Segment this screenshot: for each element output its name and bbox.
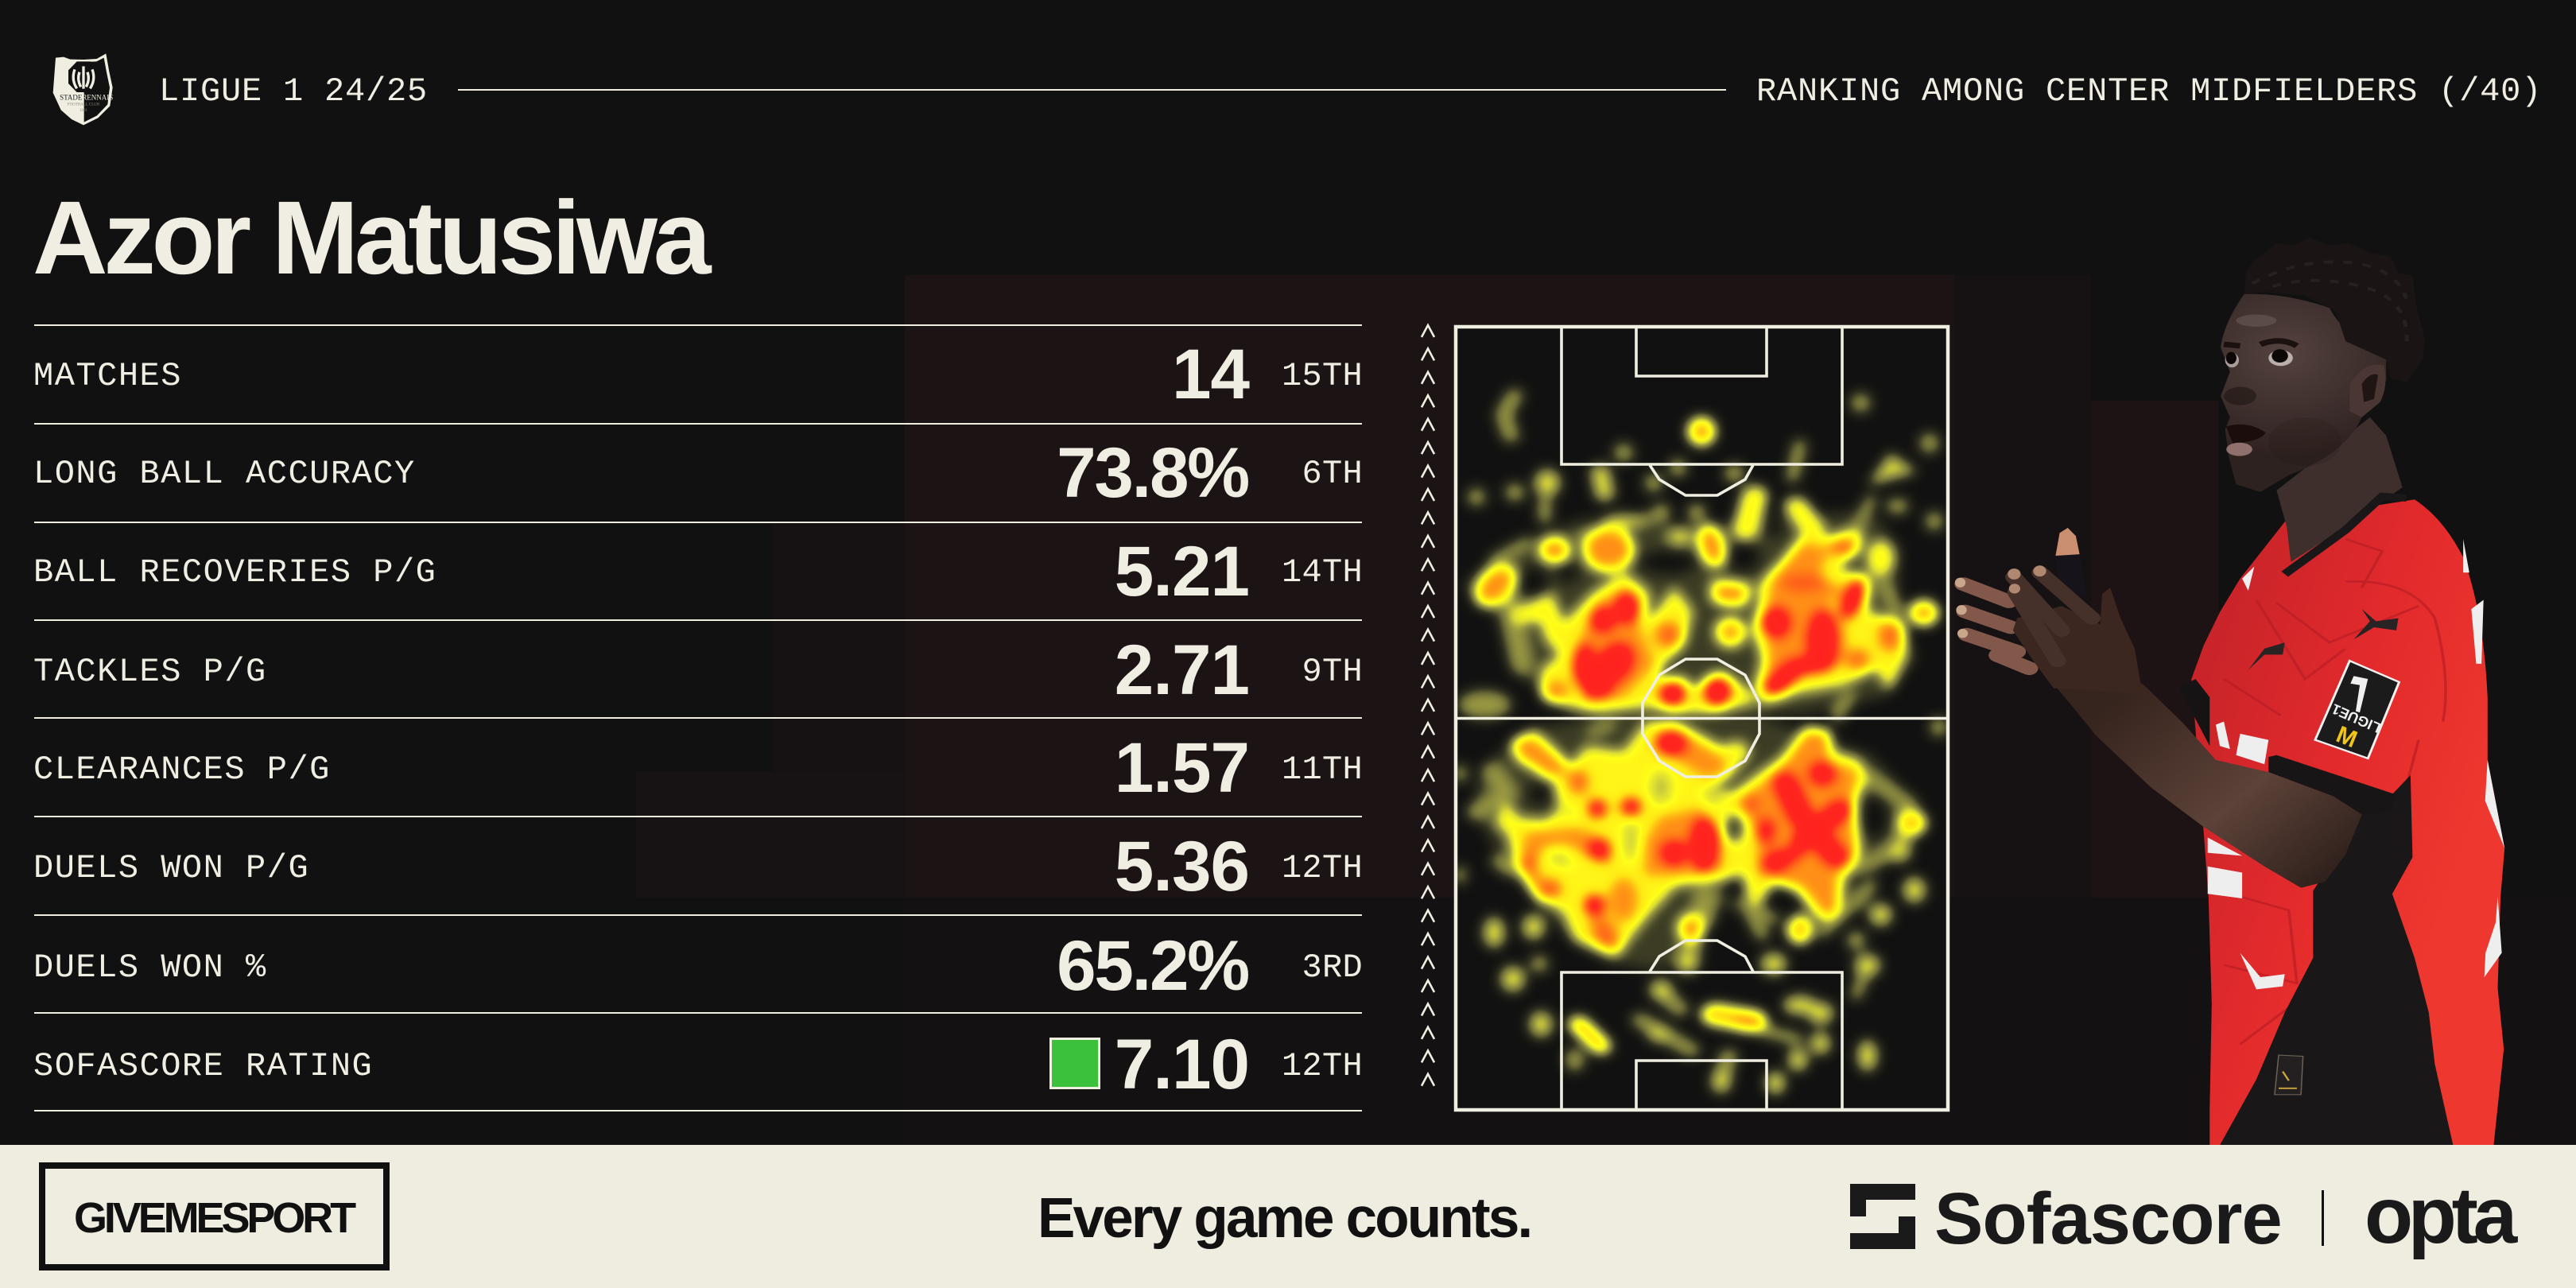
mouth xyxy=(2226,425,2266,443)
right hand xyxy=(2013,588,2151,694)
row: matches: 15TH xyxy=(1282,357,1363,395)
row: ball recoveries xyxy=(33,531,1363,611)
row: duels won percent xyxy=(33,925,1363,1005)
row: tackles: 2.71 xyxy=(1115,630,1249,709)
row: ball recoveries: 5.21 xyxy=(1115,531,1249,611)
row: clearances xyxy=(33,727,1363,807)
tagline: Every game counts. xyxy=(1038,1187,1530,1250)
hair xyxy=(2244,238,2425,382)
row: long ball accuracy xyxy=(33,433,1363,512)
football pitch lines xyxy=(1456,327,1948,1110)
row: clearances: CLEARANCES P/G xyxy=(33,751,331,789)
raised finger with tape xyxy=(2055,528,2080,556)
jersey xyxy=(2191,499,2504,1145)
givemesport logo xyxy=(42,1166,386,1267)
dark sleeve behind arm xyxy=(2179,679,2209,746)
row: ball recoveries: BALL RECOVERIES P/G xyxy=(33,553,436,592)
crest lettering: RENNAIS xyxy=(82,93,113,101)
footer band xyxy=(0,1145,2576,1288)
heatmap xyxy=(1447,318,1956,1121)
row: sofascore rating: 7.10 xyxy=(1115,1024,1249,1104)
black side panel xyxy=(2220,775,2453,1145)
head xyxy=(2221,294,2386,492)
collar xyxy=(2285,496,2407,574)
row: long ball accuracy: 6TH xyxy=(1302,455,1363,493)
row: duels won percent: 3RD xyxy=(1302,949,1363,987)
row: long ball accuracy: LONG BALL ACCURACY xyxy=(33,455,416,493)
row: duels won per game: 5.36 xyxy=(1115,826,1249,906)
pitch background xyxy=(1454,325,1949,1111)
left hand fingers xyxy=(1964,584,2029,669)
right arm xyxy=(2054,684,2362,888)
sofascore logo: Sofascore xyxy=(1934,1178,2282,1259)
crest lettering xyxy=(60,93,113,113)
row: ball recoveries: 14TH xyxy=(1282,553,1363,592)
sleeve patch xyxy=(2315,661,2399,758)
neck xyxy=(2276,417,2403,562)
row: matches xyxy=(33,334,1363,413)
pin badge xyxy=(2275,1055,2303,1095)
row: sofascore rating: 12TH xyxy=(1282,1047,1363,1085)
row: matches: 14 xyxy=(1172,334,1250,413)
row: sofascore rating: SOFASCORE RATING xyxy=(33,1047,373,1085)
row: clearances: 11TH xyxy=(1282,751,1363,789)
eyes xyxy=(2268,350,2293,366)
row: tackles: TACKLES P/G xyxy=(33,653,267,691)
ear xyxy=(2349,364,2385,417)
header: league label: LIGUE 1 24/25 xyxy=(159,72,428,111)
row: duels won percent: DUELS WON % xyxy=(33,949,267,987)
title: player name: Azor Matusiwa xyxy=(33,179,712,296)
player photo illustration xyxy=(1955,238,2504,1145)
crest lettering: 1901 xyxy=(80,109,87,113)
row: matches: MATCHES xyxy=(33,357,182,395)
row: duels won per game xyxy=(33,826,1363,906)
header: ranking label: RANKING AMONG CENTER MIDFIELDERS (/40) xyxy=(1756,72,2542,111)
row: duels won per game: 12TH xyxy=(1282,849,1363,887)
attack direction chevrons xyxy=(1422,325,1434,1086)
row: clearances: 1.57 xyxy=(1115,727,1249,807)
stats table xyxy=(33,324,1363,1111)
cuff xyxy=(2268,755,2396,815)
puma logos xyxy=(2248,609,2399,670)
crest lettering: FOOTBALL CLUB xyxy=(68,103,100,107)
player photo illustration: M xyxy=(2333,721,2361,753)
row: tackles xyxy=(33,630,1363,709)
row: tackles: 9TH xyxy=(1302,653,1363,691)
row: long ball accuracy: 73.8% xyxy=(1057,433,1248,512)
patch text: LIGUE1 xyxy=(2330,700,2383,736)
row: duels won per game: DUELS WON P/G xyxy=(33,849,309,887)
crest lettering: STADE xyxy=(60,93,83,101)
jersey white print xyxy=(2208,539,2504,989)
opta logo: opta xyxy=(2365,1171,2519,1260)
row: sofascore rating xyxy=(33,1024,1363,1104)
givemesport logo: GIVEMESPORT xyxy=(74,1194,356,1242)
header: club crest xyxy=(53,53,113,125)
row: duels won percent: 65.2% xyxy=(1057,925,1248,1005)
